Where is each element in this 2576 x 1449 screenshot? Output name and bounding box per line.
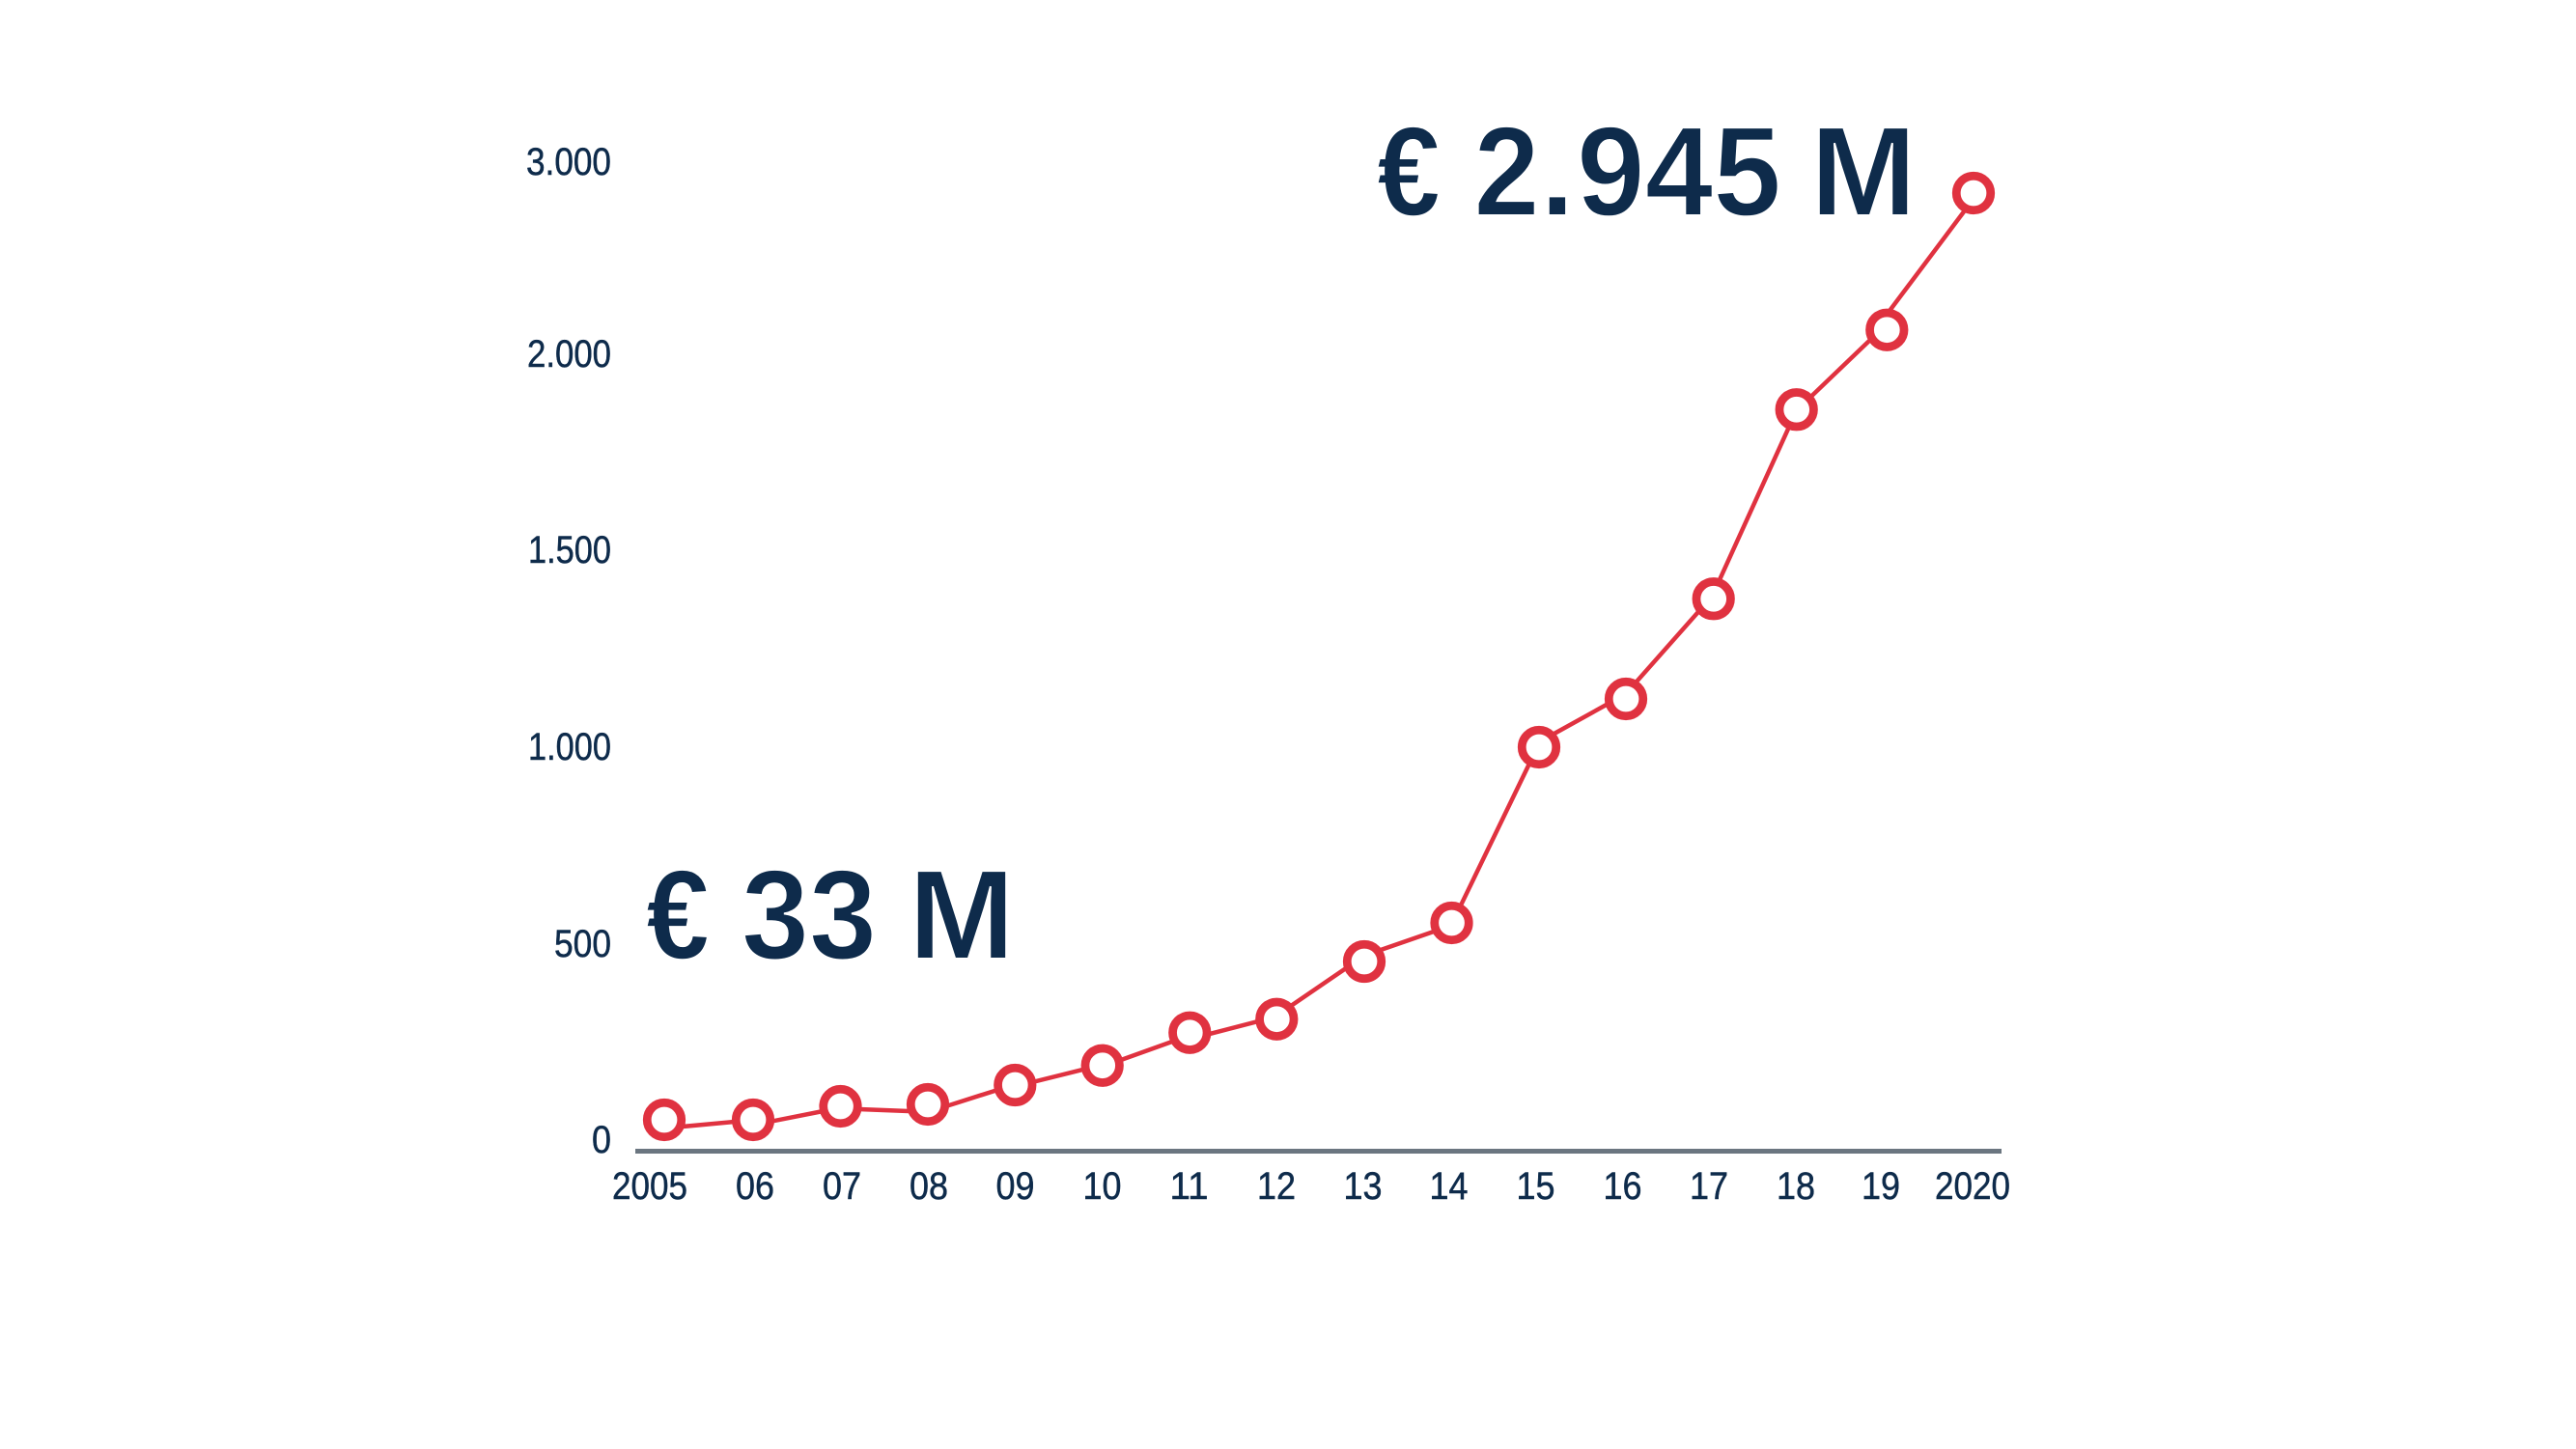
x axis labels: 13 xyxy=(1344,1165,1383,1208)
x axis labels: 11 xyxy=(1170,1165,1209,1208)
x axis labels: 07 xyxy=(823,1165,861,1208)
data line segments xyxy=(684,210,1965,1127)
callout: end value: M xyxy=(1810,100,1917,242)
x axis labels: 19 xyxy=(1862,1165,1900,1208)
x axis labels: 06 xyxy=(736,1165,774,1208)
x axis labels: 10 xyxy=(1083,1165,1122,1208)
x axis labels: 09 xyxy=(996,1165,1035,1208)
y axis labels: 500 xyxy=(554,923,611,965)
callout: start value: 33 xyxy=(742,844,877,986)
callout: end value: 2 xyxy=(1473,100,1539,242)
x axis labels: 2020 xyxy=(1935,1165,2010,1208)
y axis labels: 3.000 xyxy=(526,141,611,183)
x axis labels: 2005 xyxy=(612,1165,687,1208)
x axis labels: 12 xyxy=(1257,1165,1296,1208)
callout: end value: € xyxy=(1377,100,1441,242)
x axis labels: 15 xyxy=(1516,1165,1554,1208)
y axis labels: 1.500 xyxy=(528,529,611,571)
x axis labels: 17 xyxy=(1690,1165,1728,1208)
callout: end value: . xyxy=(1540,100,1575,242)
data point markers xyxy=(647,176,1991,1137)
y axis labels: 0 xyxy=(592,1119,611,1161)
x axis labels: 14 xyxy=(1429,1165,1468,1208)
callout: start value: € xyxy=(646,844,710,986)
x axis labels: 16 xyxy=(1603,1165,1641,1208)
callout: start value xyxy=(646,844,1015,986)
callout: start value: M xyxy=(909,844,1015,986)
x axis line xyxy=(635,1149,2002,1154)
callout: end value xyxy=(1377,100,1917,242)
y axis labels: 2.000 xyxy=(527,333,611,376)
x axis labels xyxy=(612,1165,2010,1208)
y axis labels xyxy=(526,141,611,1161)
y axis labels: 1.000 xyxy=(528,726,611,768)
x axis labels: 08 xyxy=(910,1165,948,1208)
x axis labels: 18 xyxy=(1777,1165,1815,1208)
callout: end value: 945 xyxy=(1577,100,1781,242)
